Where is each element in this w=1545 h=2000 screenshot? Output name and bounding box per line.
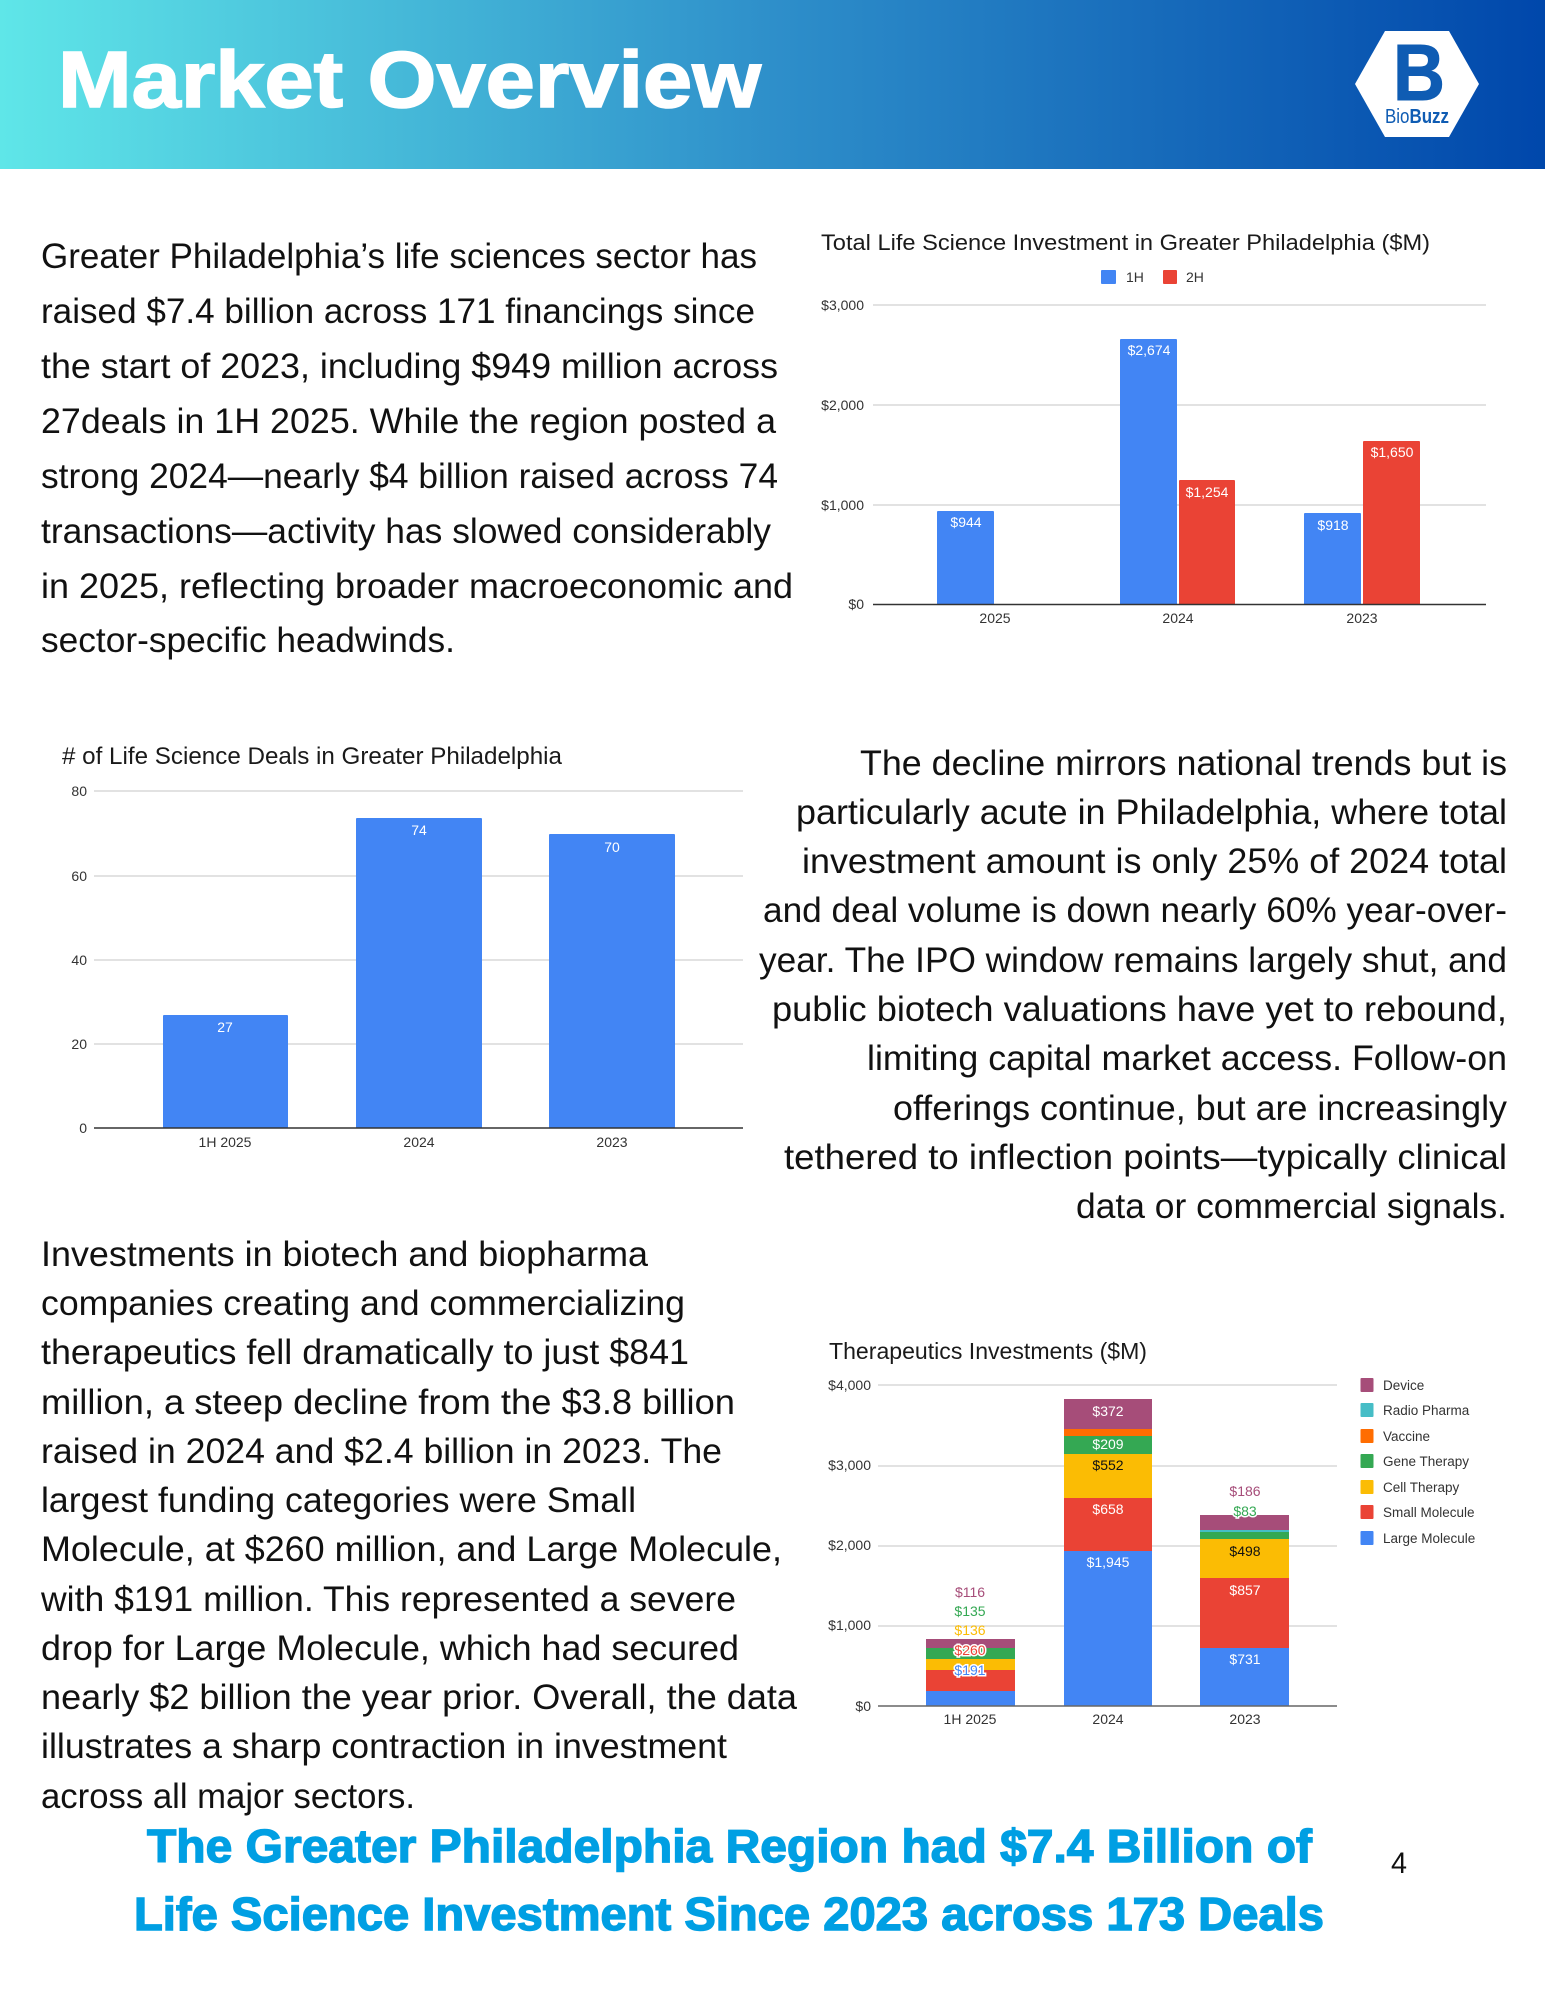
legend: 2H bbox=[1186, 269, 1204, 285]
y axis labels: 0 bbox=[79, 1120, 87, 1136]
closing headline bbox=[134, 1820, 1324, 1940]
text block: sector overview: Greater Philadelphia’s life sciences sector has bbox=[41, 237, 757, 276]
bars with values: 74 bbox=[411, 822, 427, 838]
legend: 1H bbox=[1126, 269, 1144, 285]
legend: Device bbox=[1383, 1378, 1424, 1393]
closing headline: The Greater Philadelphia Region had $7.4 Billion of bbox=[147, 1820, 1313, 1872]
text block: sector overview: 27deals in 1H 2025. While the region posted a bbox=[41, 402, 777, 441]
text block: therapeutics: therapeutics fell dramatically to just $841 bbox=[41, 1333, 689, 1372]
icon: BioBuzz logo: B bbox=[1393, 28, 1445, 117]
text block: therapeutics bbox=[40, 1235, 798, 1816]
chart: number of deals bbox=[62, 743, 743, 1150]
text block: therapeutics: Investments in biotech and biopharma bbox=[41, 1235, 649, 1274]
text block: sector overview: raised $7.4 billion across 171 financings since bbox=[41, 292, 755, 331]
text block: national trends: public biotech valuations have yet to rebound, bbox=[772, 990, 1507, 1029]
text block: national trends: tethered to inflection points—typically clinical bbox=[784, 1138, 1507, 1177]
stacked bar: 2023: $83 bbox=[1233, 1503, 1257, 1519]
bars with values bbox=[937, 339, 1420, 605]
bars with values: $2,674 bbox=[1128, 342, 1171, 358]
legend: Small Molecule bbox=[1383, 1505, 1475, 1520]
y axis labels: $1,000 bbox=[828, 1617, 871, 1633]
x axis labels: 2024 bbox=[1162, 610, 1194, 626]
y axis labels: 40 bbox=[71, 952, 87, 968]
bars with values: $1,254 bbox=[1186, 484, 1229, 500]
stacked bar: 1H 2025: $136 bbox=[954, 1622, 986, 1638]
stacked bar: 2024: $372 bbox=[1092, 1403, 1124, 1419]
x axis labels: 1H 2025 bbox=[944, 1711, 997, 1727]
stacked bar: 1H 2025: $116 bbox=[955, 1584, 985, 1600]
chart title: Therapeutics Investments ($M) bbox=[829, 1338, 1147, 1364]
legend: Large Molecule bbox=[1383, 1531, 1475, 1546]
chart: total life science investment bbox=[821, 230, 1486, 626]
y axis labels: $4,000 bbox=[828, 1377, 871, 1393]
stacked bar: 2023: $186 bbox=[1229, 1483, 1261, 1499]
x axis labels bbox=[979, 610, 1378, 626]
text block: national trends: particularly acute in Philadelphia, where total bbox=[796, 793, 1507, 832]
x axis labels: 2023 bbox=[1229, 1711, 1261, 1727]
x axis labels: 2023 bbox=[596, 1134, 628, 1150]
x axis labels: 1H 2025 bbox=[199, 1134, 252, 1150]
text block: therapeutics: illustrates a sharp contraction in investment bbox=[41, 1727, 727, 1766]
y axis labels: $1,000 bbox=[821, 497, 864, 513]
text block: national trends: The decline mirrors national trends but is bbox=[860, 744, 1507, 783]
text block: therapeutics: raised in 2024 and $2.4 billion in 2023. The bbox=[41, 1432, 722, 1471]
text block: therapeutics: million, a steep decline from the $3.8 billion bbox=[41, 1383, 735, 1422]
stacked bar: 2023: $498 bbox=[1229, 1543, 1261, 1559]
x axis labels: 2025 bbox=[979, 610, 1011, 626]
stacked bar: 2023: $731 bbox=[1229, 1651, 1261, 1667]
text block: national trends: data or commercial signals. bbox=[1076, 1187, 1507, 1226]
text block: national trends: year. The IPO window remains largely shut, and bbox=[759, 941, 1507, 980]
stacked bar: 2024: $209 bbox=[1092, 1436, 1124, 1452]
bars with values: $1,650 bbox=[1371, 444, 1414, 460]
y axis labels: $3,000 bbox=[828, 1457, 871, 1473]
legend: Cell Therapy bbox=[1383, 1480, 1460, 1495]
stacked bar: 2024: $658 bbox=[1092, 1501, 1124, 1517]
text block: national trends: offerings continue, but are increasingly bbox=[893, 1089, 1508, 1128]
icon: BioBuzz logo bbox=[1355, 28, 1479, 137]
icon: BioBuzz logo: BioBuzz bbox=[1385, 106, 1449, 128]
text block: sector overview: transactions—activity has slowed considerably bbox=[41, 512, 771, 551]
text block: national trends bbox=[759, 744, 1508, 1226]
y axis labels: $2,000 bbox=[821, 397, 864, 413]
page number: 4 bbox=[1391, 1847, 1407, 1880]
text block: sector overview: in 2025, reflecting broader macroeconomic and bbox=[41, 567, 793, 606]
text block: therapeutics: Molecule, at $260 million, and Large Molecule, bbox=[41, 1530, 782, 1569]
legend: Vaccine bbox=[1383, 1429, 1430, 1444]
y axis labels: 60 bbox=[71, 868, 87, 884]
stacked bar: 1H 2025: $135 bbox=[954, 1603, 986, 1619]
text block: sector overview: strong 2024—nearly $4 billion raised across 74 bbox=[41, 457, 778, 496]
y axis labels: $0 bbox=[848, 596, 864, 612]
y axis labels bbox=[71, 783, 87, 1136]
text block: therapeutics: companies creating and commercializing bbox=[41, 1284, 685, 1323]
text block: sector overview: the start of 2023, including $949 million across bbox=[41, 347, 778, 386]
stacked bar: 1H 2025: $260 bbox=[954, 1642, 986, 1658]
text block: national trends: and deal volume is down nearly 60% year-over- bbox=[763, 891, 1507, 930]
chart: therapeutics investments bbox=[828, 1338, 1475, 1727]
text block: therapeutics: drop for Large Molecule, which had secured bbox=[41, 1629, 739, 1668]
text block: national trends: investment amount is only 25% of 2024 total bbox=[802, 842, 1507, 881]
stacked bar: 2024 bbox=[1064, 1399, 1152, 1706]
bars with values: $918 bbox=[1317, 517, 1349, 533]
stacked bar: 2024: $1,945 bbox=[1087, 1554, 1130, 1570]
y axis labels: 80 bbox=[71, 783, 87, 799]
y axis labels bbox=[828, 1377, 871, 1714]
text block: therapeutics: with $191 million. This represented a severe bbox=[40, 1580, 736, 1619]
y axis labels: $3,000 bbox=[821, 297, 864, 313]
y axis labels: $2,000 bbox=[828, 1537, 871, 1553]
text block: therapeutics: largest funding categories were Small bbox=[41, 1481, 636, 1520]
x axis labels bbox=[944, 1711, 1261, 1727]
closing headline: Life Science Investment Since 2023 across 173 Deals bbox=[134, 1888, 1324, 1940]
title: Market Overview bbox=[58, 35, 762, 124]
bars with values bbox=[163, 818, 675, 1128]
stacked bar: 2023 bbox=[1200, 1483, 1289, 1706]
text block: therapeutics: nearly $2 billion the year prior. Overall, the data bbox=[41, 1678, 798, 1717]
x axis labels: 2024 bbox=[403, 1134, 435, 1150]
bars with values: $944 bbox=[950, 514, 982, 530]
x axis labels bbox=[199, 1134, 628, 1150]
legend bbox=[1360, 1378, 1475, 1546]
stacked bar: 2023: $857 bbox=[1229, 1582, 1261, 1598]
y axis labels: 20 bbox=[71, 1036, 87, 1052]
y axis labels bbox=[821, 297, 864, 612]
bars with values: 70 bbox=[604, 839, 620, 855]
x axis labels: 2023 bbox=[1346, 610, 1378, 626]
chart title: # of Life Science Deals in Greater Philadelphia bbox=[62, 743, 562, 770]
header banner bbox=[0, 0, 1545, 169]
x axis labels: 2024 bbox=[1092, 1711, 1124, 1727]
legend: Gene Therapy bbox=[1383, 1454, 1469, 1469]
stacked bar: 1H 2025: $191 bbox=[954, 1662, 986, 1678]
y axis labels: $0 bbox=[855, 1698, 871, 1714]
stacked bar: 2024: $552 bbox=[1092, 1457, 1124, 1473]
chart title: Total Life Science Investment in Greater Philadelphia ($M) bbox=[821, 230, 1430, 255]
stacked bar: 1H 2025 bbox=[926, 1584, 1015, 1706]
bars with values: 27 bbox=[217, 1019, 233, 1035]
text block: sector overview bbox=[41, 237, 793, 660]
legend bbox=[1101, 269, 1204, 285]
text block: national trends: limiting capital market access. Follow-on bbox=[867, 1039, 1507, 1078]
legend: Radio Pharma bbox=[1383, 1403, 1470, 1418]
text block: therapeutics: across all major sectors. bbox=[41, 1777, 415, 1816]
text block: sector overview: sector-specific headwinds. bbox=[41, 621, 455, 660]
